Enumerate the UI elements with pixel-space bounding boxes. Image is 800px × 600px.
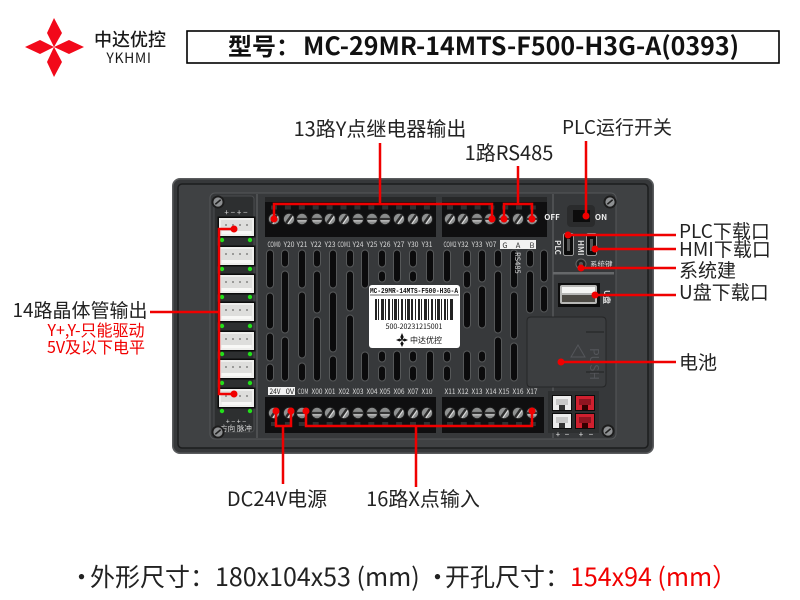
bottom terminal labels: X13 [472,386,482,397]
top terminal labels: RS485 [512,252,523,274]
bottom terminal labels: X10 [422,386,432,397]
download ports: HMI [575,240,586,256]
left column: 14 transistor output connectors [214,196,256,434]
callout: 14 transistor outputs [12,226,238,398]
bottom terminal labels: X12 [458,386,468,397]
power connectors: + [579,429,584,440]
bottom terminal labels: X06 [394,386,404,397]
callout: USB download port: U盘下载口 [679,278,769,305]
bottom terminal labels: COM [298,386,308,397]
top terminal labels: Y23 [324,239,336,250]
callout: PLC download port: PLC下载口 [679,217,770,244]
top terminal labels: A [516,240,521,251]
power connectors: − [565,429,570,440]
bottom terminal labels: X17 [526,386,538,397]
left column: 14 transistor output connectors: 方向 脉冲 [220,423,252,434]
callout: battery: 电池 [679,348,717,375]
top terminal labels: Y21 [296,239,308,250]
power switch [544,205,607,227]
USB port [558,283,612,307]
dimensions text: 154x94 (mm） [570,558,737,594]
direction and pulse labels: + − + − [226,417,246,427]
ventilation slots [266,250,548,381]
dimensions text: 外形尺寸：180x104x53 (mm) [90,558,420,594]
label logo: 中达优控 [410,335,442,346]
label serial number: 500-20231215001 [386,322,443,332]
callout: 16 X inputs [302,408,536,512]
power connectors: − [589,429,594,440]
bottom terminal labels: 0V [286,386,295,397]
callout: DC24V power [227,408,327,512]
dimensions text [69,558,737,594]
bottom terminal labels: X15 [498,386,510,397]
callout: DC24V power: DC24V电源 [227,483,327,512]
callout: system button [578,256,736,283]
callout: PLC run switch: PLC运行开关 [562,113,672,140]
power switch: ON [595,212,607,223]
bottom terminal labels: X11 [444,386,456,397]
top terminal labels: Y26 [379,239,390,250]
top terminal labels: Y33 [471,239,482,250]
top terminal labels: Y20 [283,239,294,250]
dimensions text: · [69,558,94,594]
callout: battery [558,348,717,375]
device housing [172,178,654,454]
callout: HMI download port [592,235,771,262]
top terminal labels: Y32 [457,239,468,250]
callout: RS485: 1路RS485 [465,137,553,166]
download ports [552,234,596,256]
bottom terminal labels: X07 [408,386,418,397]
bottom terminal labels: X01 [324,386,336,397]
corner mounting screws [212,196,616,438]
callout: 13 Y relay outputs: 13路Y点继电器输出 [294,113,466,142]
top terminal labels: Y30 [407,239,418,250]
brand name: 中达优控 [94,26,166,52]
barcode [375,299,453,320]
top terminal labels: Y27 [393,239,404,250]
battery cover: PUSH [586,348,603,380]
title box: MC-29MR-14MTS-F500-H3G-A(0393) [303,27,739,63]
callout: 14 transistor outputs: 14路晶体管输出 [12,296,148,323]
product label [369,285,460,348]
logo [25,18,166,77]
battery cover [527,317,606,387]
bottom terminal labels: X16 [512,386,524,397]
top terminal labels: Y25 [366,239,378,250]
device: controller back panel [172,178,654,454]
callout: RS485 [465,137,553,222]
note: voltage limit: Y+,Y-只能驱动 [46,317,145,341]
power connectors [548,391,599,440]
dimensions text: 开孔尺寸： [445,558,570,594]
top terminal labels: Y07 [485,239,496,250]
top terminal labels: Y31 [421,239,432,250]
bottom terminal labels: X05 [380,386,390,397]
download ports: PLC [552,240,563,256]
top terminal labels: COM0 [268,239,280,250]
bottom terminal labels [268,386,538,397]
callout: PLC download port [564,217,770,244]
callout: 16 X inputs: 16路X点输入 [366,483,480,512]
USB port: U盘 [601,290,612,304]
callout: HMI download port: HMI下载口 [679,235,771,262]
note: voltage level: 5V及以下电平 [47,334,145,358]
bottom terminal blocks [265,397,544,433]
bottom terminal labels: X00 [312,386,322,397]
status LEDs [220,238,252,413]
bottom terminal labels: X04 [366,386,378,397]
bottom terminal labels: X14 [486,386,496,397]
system button [576,259,613,270]
top terminal labels: Y22 [310,239,322,250]
polarity marks: + − + − [224,207,248,218]
icon: red four-point star [25,18,84,77]
top terminal blocks [265,197,547,237]
callout: system button: 系统建 [679,256,736,283]
power switch: OFF [544,212,560,223]
power connectors: + [556,429,561,440]
label model text: MC-29MR-14MTS-F500-H3G-A [370,288,458,296]
brand latin name: YKHMI [105,48,152,68]
callout: 13 Y relay outputs [270,113,496,222]
callout: USB download port [592,278,769,305]
title box: 型号： [228,27,300,62]
top terminal labels: B [530,240,535,251]
top terminal labels: Y24 [352,239,364,250]
bottom terminal labels: X03 [352,386,364,397]
top terminal labels: G [502,240,508,251]
bottom terminal labels: 24V [270,386,281,397]
system button: 系统键 [590,259,613,270]
bottom terminal labels: X02 [338,386,350,397]
callout: PLC run switch [562,113,672,220]
top terminal labels [268,239,536,274]
dimensions text: · [425,558,450,594]
top terminal labels: COM2 [444,239,456,250]
top terminal labels: COM1 [338,239,350,250]
